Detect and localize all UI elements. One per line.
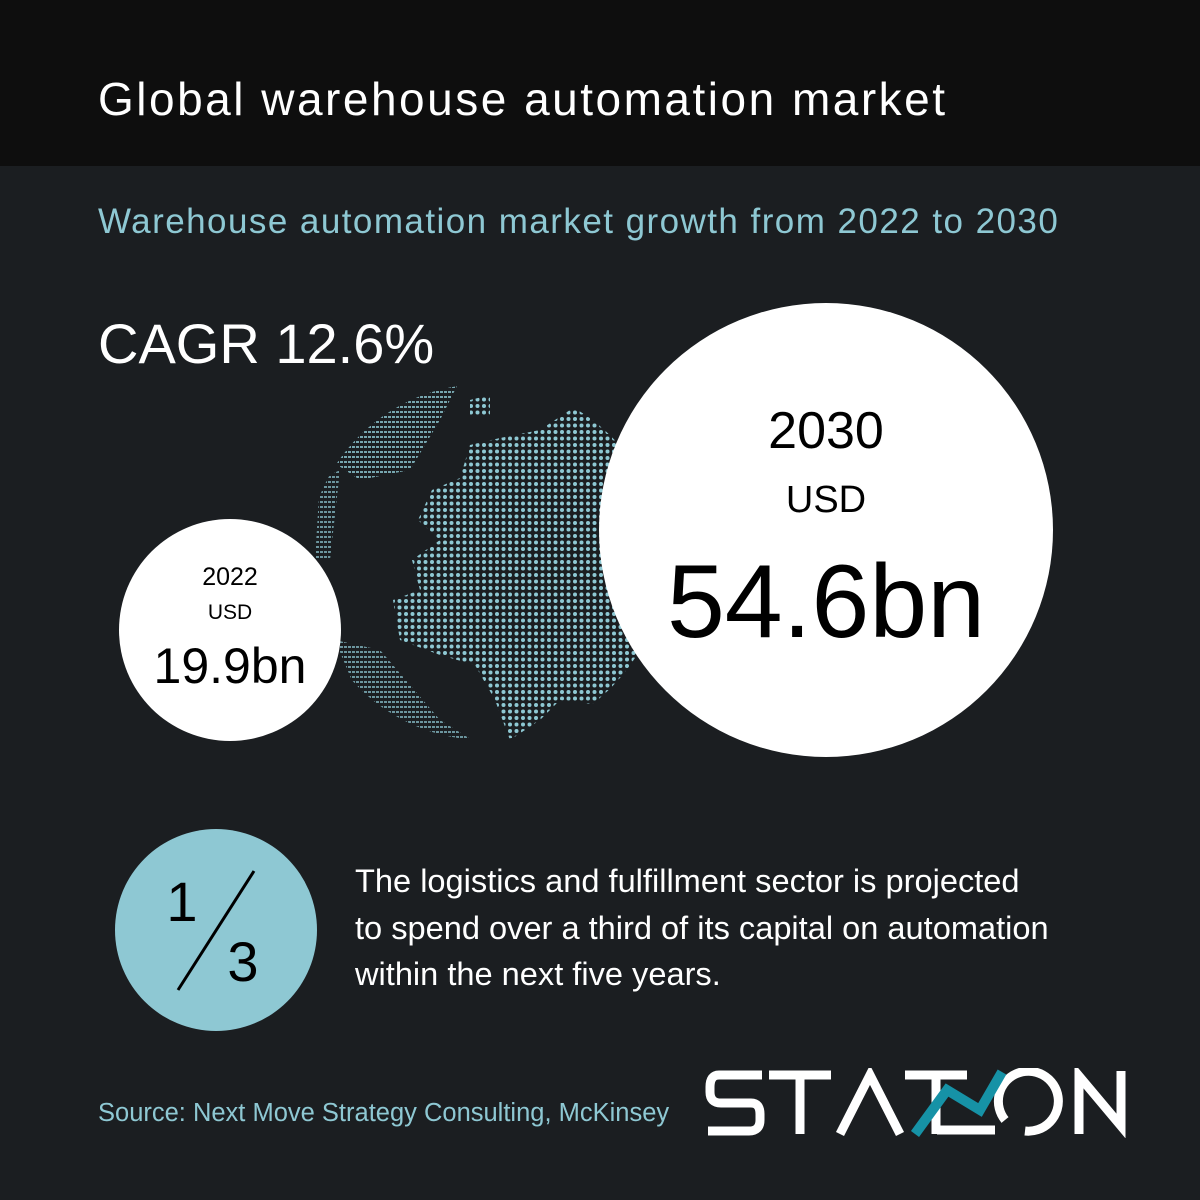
logo [706, 1068, 1126, 1138]
description text: within the next five years. [355, 955, 721, 992]
header bar [0, 0, 1200, 166]
description text [355, 862, 1049, 992]
54.6bn value: 54.6bn [667, 544, 985, 660]
globe [316, 386, 636, 738]
19.9bn value: 19.9bn [154, 638, 306, 694]
2022 label: 2022 [202, 563, 258, 591]
small circle: 2022 [119, 519, 341, 741]
USD label: USD [208, 601, 252, 624]
title: Global warehouse automation market [98, 73, 948, 125]
description text: The logistics and fulfillment sector is projected [355, 862, 1020, 899]
subtitle: Warehouse automation market growth from 2022 to 2030 [98, 202, 1059, 241]
fraction: 3 [227, 930, 259, 993]
one third circle [115, 829, 317, 1031]
source: Source: Next Move Strategy Consulting, McKinsey [98, 1099, 669, 1127]
2030 label: 2030 [768, 402, 884, 460]
USD label: USD [786, 479, 866, 521]
big circle: 2030 [599, 303, 1053, 757]
CAGR heading: CAGR 12.6% [98, 312, 434, 375]
description text: to spend over a third of its capital on automation [355, 908, 1049, 946]
fraction: 1 [166, 870, 198, 933]
fraction [166, 870, 259, 993]
